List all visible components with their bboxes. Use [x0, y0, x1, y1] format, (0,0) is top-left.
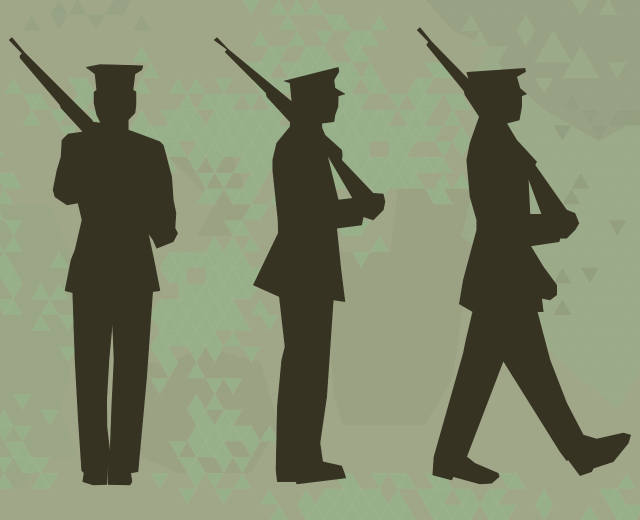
faint triangles top left — [23, 0, 151, 31]
green triangles top right — [462, 0, 626, 94]
rifle 1 — [9, 38, 93, 133]
darker triangles on green zone — [553, 94, 640, 315]
tonal zones — [0, 204, 77, 489]
body 2 — [253, 67, 385, 484]
body 3 — [433, 68, 631, 484]
soldier 3: marching — [417, 28, 631, 484]
body 1 — [53, 64, 178, 485]
soldier 2: standing side view — [214, 38, 385, 484]
rifle 2 — [214, 38, 295, 125]
rifle 3 — [417, 28, 478, 100]
dark zone top right — [425, 0, 640, 141]
green zone right — [462, 31, 640, 410]
soldier 1: facing viewer — [9, 38, 178, 485]
